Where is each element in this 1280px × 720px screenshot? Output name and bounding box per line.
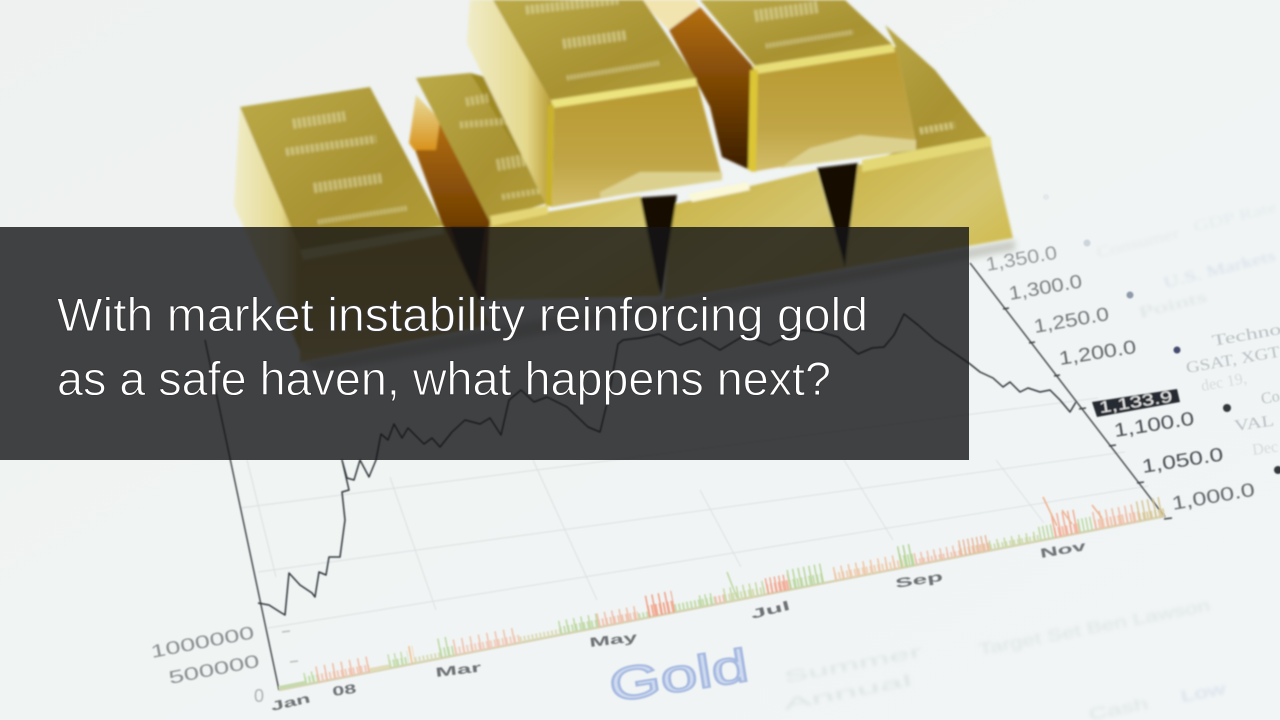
side notes: Techno xyxy=(1211,321,1280,350)
bar: centre lower xyxy=(633,163,858,300)
volume axis labels xyxy=(149,622,264,706)
side notes: dec 19, xyxy=(1200,370,1248,395)
month labels: May xyxy=(589,629,639,650)
faded side notes: U.S. Markets xyxy=(1162,248,1278,292)
chart grid xyxy=(240,398,1148,628)
stamped marks xyxy=(286,116,408,222)
list bullets xyxy=(1043,194,1280,474)
price axis labels: 1,050.0 xyxy=(1140,444,1225,478)
month labels: Jul xyxy=(749,598,792,622)
blurred caption text: Summer xyxy=(783,643,925,687)
price axis labels xyxy=(984,243,1257,515)
month labels: Mar xyxy=(435,659,482,680)
side notes: GSAT, XGT xyxy=(1185,344,1280,377)
stamped marks xyxy=(526,0,659,78)
month labels: Jan xyxy=(269,690,312,714)
volume bars xyxy=(277,497,1165,690)
price axis labels: 1,350.0 xyxy=(984,243,1059,276)
faded side notes: Points xyxy=(1137,288,1209,322)
stamped marks xyxy=(755,7,853,46)
side notes xyxy=(1185,321,1280,459)
faded side notes xyxy=(1095,199,1278,322)
shadow under bars xyxy=(300,240,1015,372)
gold chart label: Gold xyxy=(605,639,752,712)
blurred caption text xyxy=(783,597,1228,720)
side notes: VAL xyxy=(1233,413,1275,435)
price axis labels: 1,200.0 xyxy=(1057,337,1138,370)
month labels: 08 xyxy=(331,681,357,699)
faded side notes: GDP Rate xyxy=(1192,199,1278,236)
bar: left xyxy=(234,87,490,362)
blurred caption text: Target Set Ben Lawson xyxy=(978,597,1211,659)
bar: far right lower xyxy=(845,25,1013,268)
current price tag: 1,133.9 xyxy=(1098,389,1174,417)
panel: headline overlay band xyxy=(0,227,969,460)
price axis labels: 1,000.0 xyxy=(1170,480,1257,515)
heading xyxy=(57,288,868,405)
gold bars stack xyxy=(234,0,1015,372)
heading line 2: as a safe haven, what happens next? xyxy=(57,352,831,405)
chart: gold price chart on paper xyxy=(149,243,1257,714)
bar: second from left xyxy=(409,73,660,300)
month labels: Nov xyxy=(1039,538,1088,561)
stamped marks xyxy=(460,98,540,197)
price axis labels: 1,250.0 xyxy=(1032,304,1111,338)
current price tag xyxy=(1092,389,1180,417)
blurred caption text: Annual xyxy=(783,672,913,714)
bar: top right xyxy=(640,0,916,172)
price axis labels: 1,300.0 xyxy=(1007,271,1084,305)
price axis labels: 1,100.0 xyxy=(1112,409,1196,442)
volume axis labels: 0 xyxy=(254,686,264,706)
heading line 1: With market instability reinforcing gold xyxy=(57,288,868,341)
bar: top centre xyxy=(467,0,722,207)
volume axis labels: 500000 xyxy=(167,651,261,688)
price line xyxy=(258,314,1076,615)
month labels xyxy=(269,538,1088,714)
side notes: Dec xyxy=(1251,439,1279,459)
blurred caption text: Low xyxy=(1180,681,1228,706)
volume axis labels: 1000000 xyxy=(149,622,256,662)
month labels: Sep xyxy=(894,569,944,591)
chart axes xyxy=(205,263,1172,690)
faded side notes: Consumer xyxy=(1095,225,1182,262)
